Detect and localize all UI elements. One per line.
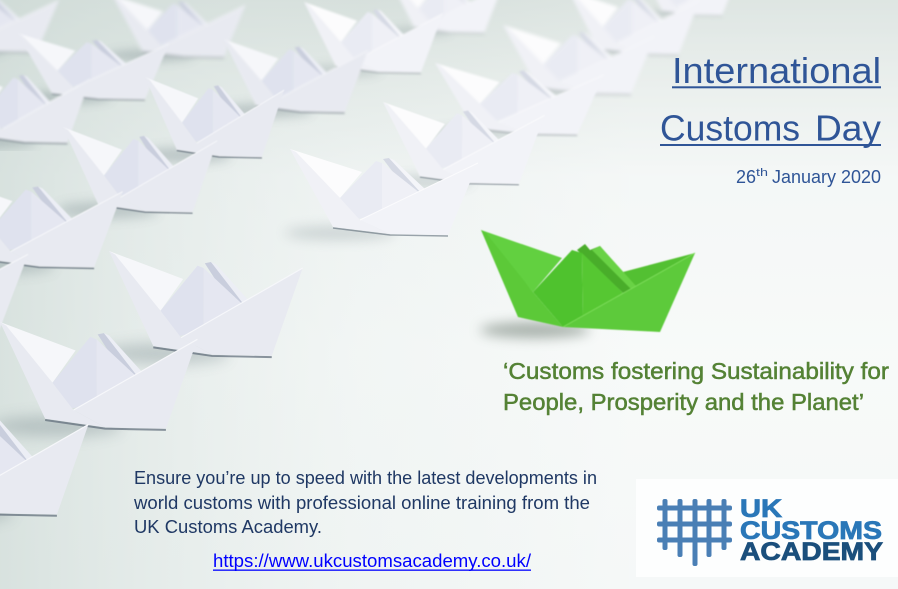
logo wordmark: ACADEMY [740, 538, 883, 566]
mid boats [0, 2, 604, 148]
date: 26 [736, 167, 756, 187]
title: Day [815, 108, 881, 148]
logo wordmark [740, 495, 883, 566]
title: Customs [660, 108, 800, 148]
body text: Ensure you’re up to speed with the latest developments in [134, 467, 597, 488]
theme quote: People, Prosperity and the Planet’ [503, 389, 864, 415]
title [660, 50, 881, 148]
near-mid boats [0, 77, 545, 340]
body text: UK Customs Academy. [134, 516, 322, 537]
logo wordmark: CUSTOMS [740, 517, 882, 545]
date: th [756, 167, 768, 179]
paper boat fleet [0, 0, 738, 522]
title: International [672, 50, 881, 91]
body text [133, 467, 597, 537]
theme quote: ‘Customs fostering Sustainability for [503, 358, 889, 384]
icon: portcullis grid [657, 499, 732, 566]
website link: https://www.ukcustomsacademy.co.uk/ [213, 550, 532, 571]
green boat shadow [480, 322, 590, 338]
icon: green paper boat [481, 230, 695, 332]
body text: world customs with professional online training from the [133, 492, 590, 513]
logo: UK Customs Academy [636, 479, 898, 577]
front boats [0, 149, 478, 522]
date: January 2020 [772, 167, 881, 187]
theme quote [503, 358, 889, 415]
far boats [0, 0, 738, 98]
logo wordmark: UK [740, 495, 782, 523]
